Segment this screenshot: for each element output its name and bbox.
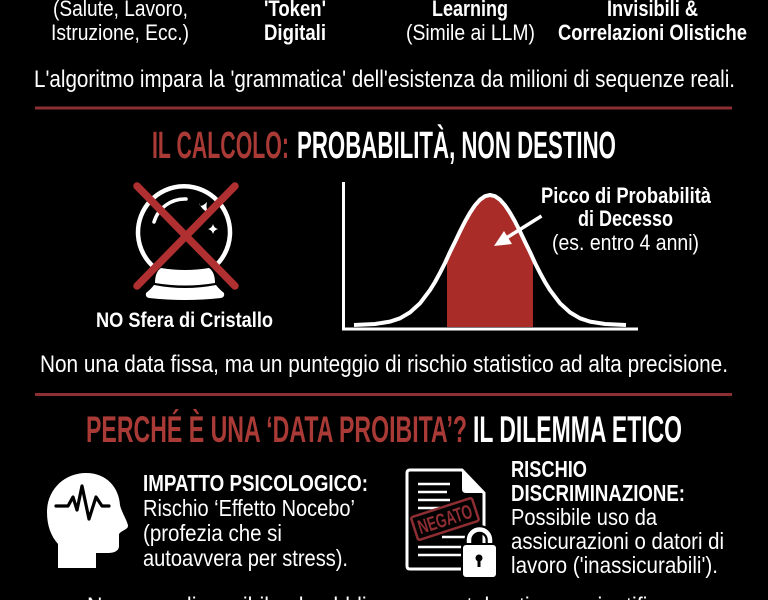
text: discrimination risk: assicurazioni o datori di <box>511 528 724 554</box>
text: discrimination risk: Possibile uso da <box>511 504 657 530</box>
icon: head with pulse <box>47 473 128 568</box>
text: holistic correlations <box>558 0 747 45</box>
text: psychological impact <box>143 470 368 571</box>
text: psychological impact: autoavvera per stress). <box>143 545 348 571</box>
text: data domains <box>51 0 189 45</box>
heading: il calcolo <box>152 123 616 167</box>
icon: lock <box>461 530 498 579</box>
icon: crossed-out crystal ball <box>137 186 235 300</box>
heading: il calcolo: IL CALCOLO: <box>152 125 289 167</box>
text: learning <box>406 0 535 45</box>
text: discrimination risk: DISCRIMINAZIONE: <box>511 480 685 506</box>
text: digital tokens <box>264 0 326 45</box>
label: no crystal ball: NO Sfera di Cristallo <box>96 309 273 332</box>
text: discrimination risk: RISCHIO <box>511 456 587 482</box>
text: psychological impact: (profezia che si <box>143 520 282 546</box>
callout: probability peak: di Decesso <box>578 206 673 231</box>
top row: data sources <box>51 0 747 45</box>
text: discrimination risk <box>511 456 724 578</box>
text: data domains: Istruzione, Ecc.) <box>51 20 189 45</box>
text: psychological impact: Rischio ‘Effetto Nocebo’ <box>143 495 355 521</box>
icon: denied document with lock <box>407 470 498 579</box>
chart: probability bell curve <box>344 182 638 329</box>
text: psychological impact: IMPATTO PSICOLOGICO: <box>143 470 368 496</box>
stamp: negato: NEGATO <box>415 501 475 539</box>
callout: probability peak <box>541 183 712 255</box>
text: digital tokens: Digitali <box>264 20 326 45</box>
heading: ethical dilemma: PERCHÉ È UNA ‘DATA PROIBITA’? <box>86 409 467 450</box>
arrow: points to peak <box>494 216 542 246</box>
text: discrimination risk: lavoro ('inassicurabili'). <box>511 552 718 578</box>
text: learning: (Simile ai LLM) <box>406 20 535 45</box>
callout: probability peak: (es. entro 4 anni) <box>552 230 699 255</box>
callout: probability peak: Picco di Probabilità <box>541 183 712 208</box>
